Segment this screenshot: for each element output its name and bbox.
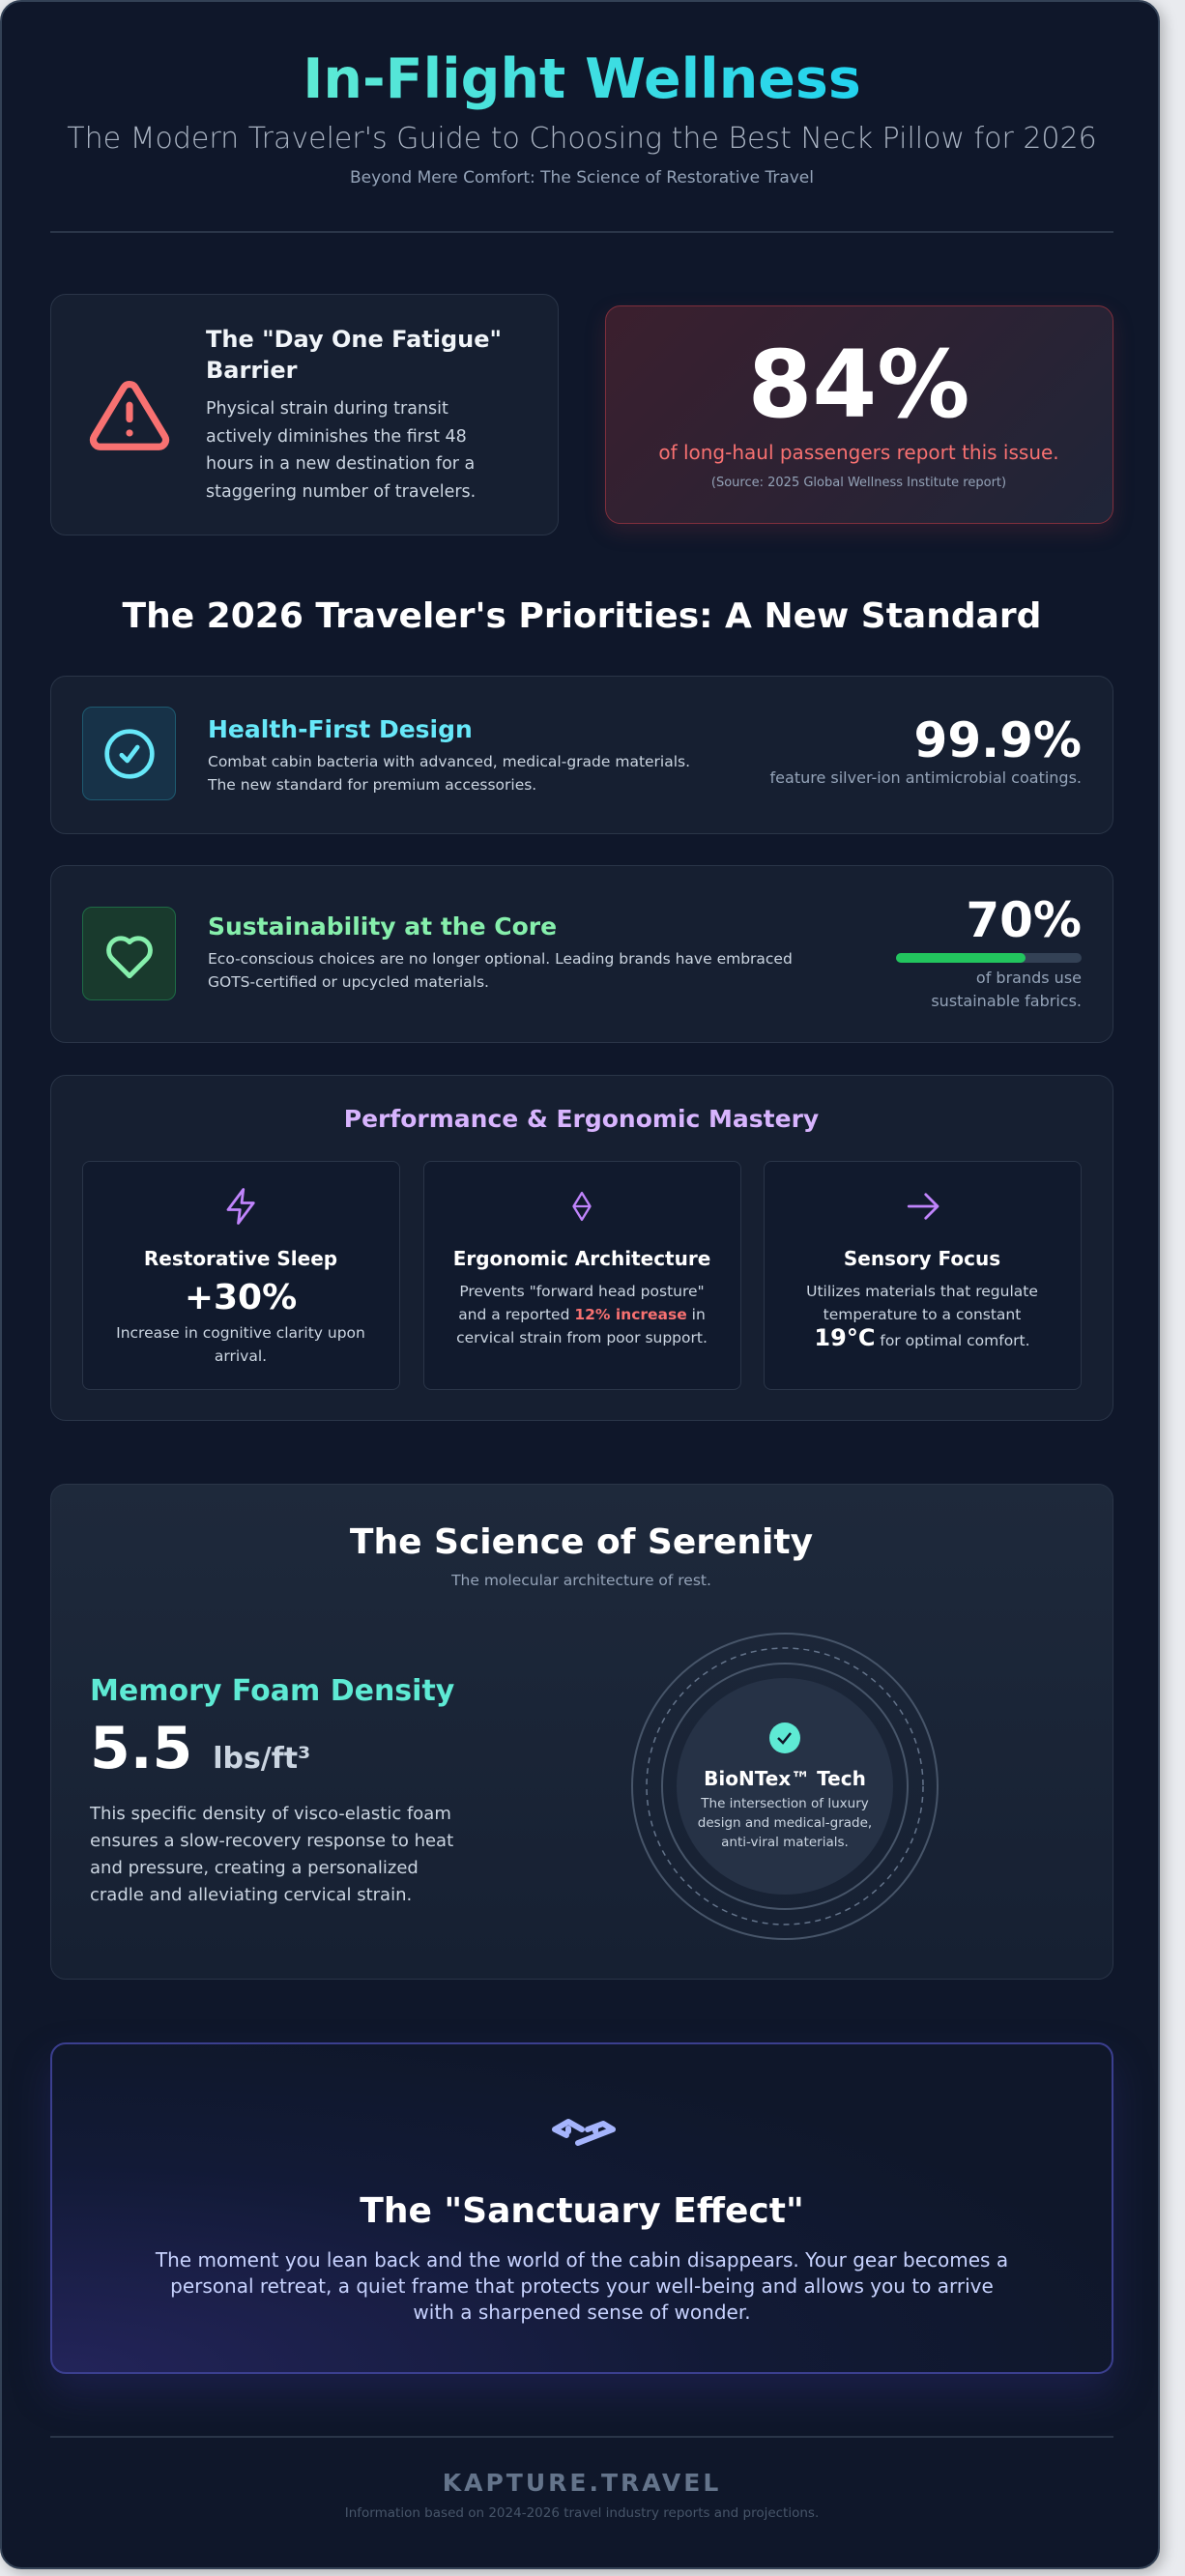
heading: Health-First Design <box>208 715 473 743</box>
icon: heart <box>82 907 176 1000</box>
panel: health-first <box>50 676 1113 834</box>
icon: warning <box>89 381 170 450</box>
card: restorative sleep: Restorative Sleep <box>144 1247 337 1270</box>
title: In-Flight Wellness <box>303 47 861 111</box>
stat with bar: sustainable fabrics. <box>931 992 1082 1010</box>
card: restorative sleep: Increase in cognitive clarity upon arrival. <box>116 1324 365 1365</box>
subtitle: The Modern Traveler's Guide to Choosing the Best Neck Pillow for 2026 <box>67 122 1097 156</box>
stat <box>769 712 1082 787</box>
card: ergonomic architecture: Ergonomic Architecture <box>453 1247 710 1270</box>
text: The moment you lean back and the world of the cabin disappears. Your gear becomes a personal retreat, a quiet frame that protects your well-being and allows you to arrive with a sharpened sense of wonder. <box>156 2248 1008 2324</box>
memory foam block: This specific density of visco-elastic foam ensures a slow-recovery response to heat and pressure, creating a personalized cradle and alleviating cervical strain. <box>90 1804 453 1905</box>
card: restorative sleep <box>82 1161 400 1390</box>
section heading: priorities: The 2026 Traveler's Priorities: A New Standard <box>123 596 1041 636</box>
heading: The "Sanctuary Effect" <box>360 2191 804 2231</box>
heading: Sustainability at the Core <box>208 912 557 941</box>
panel: day one fatigue <box>50 294 559 535</box>
icon: handshake <box>552 2119 616 2146</box>
card: sensory focus: Sensory Focus <box>844 1247 1000 1270</box>
subheading: The molecular architecture of rest. <box>451 1572 711 1589</box>
source: (Source: 2025 Global Wellness Institute report) <box>711 476 1006 490</box>
icon: bolt <box>226 1188 255 1225</box>
diagram: BioNTex circles <box>631 1633 939 1940</box>
text: Eco-conscious choices are no longer optional. Leading brands have embraced GOTS-certified or upcycled materials. <box>208 950 793 991</box>
caption: of long-haul passengers report this issue. <box>658 441 1059 464</box>
memory foam block: Memory Foam Density <box>90 1674 454 1708</box>
card: sensory focus: Utilizes materials that regulate temperature to a constant 19°C for optimal comfort. <box>806 1283 1038 1351</box>
footer note: Information based on 2024-2026 travel industry reports and projections. <box>345 2505 819 2521</box>
panel: sustainability <box>50 865 1113 1043</box>
panel: sanctuary effect <box>50 2042 1113 2374</box>
icon: check circle <box>82 707 176 800</box>
stat with bar: of brands use <box>976 969 1082 987</box>
diagram: BioNTex circles: BioNTex™ Tech <box>704 1767 866 1790</box>
text: Combat cabin bacteria with advanced, medical-grade materials. The new standard for premium accessories. <box>208 753 690 794</box>
icon: arrow <box>907 1193 939 1220</box>
stat with bar: 70% <box>966 892 1082 948</box>
card: sensory focus <box>764 1161 1082 1390</box>
panel: science of serenity <box>50 1484 1113 1980</box>
memory foam block: 5.5 lbs/ft³ <box>90 1715 310 1782</box>
stat: 99.9% <box>914 712 1082 768</box>
diagram: BioNTex circles: The intersection of luxury design and medical-grade, anti-viral materials. <box>698 1796 872 1850</box>
memory foam block <box>89 1674 454 1905</box>
stat with bar <box>896 892 1082 1010</box>
heading: Performance & Ergonomic Mastery <box>344 1105 819 1133</box>
icon: diamond <box>572 1191 592 1222</box>
panel: performance <box>50 1075 1113 1421</box>
stat: feature silver-ion antimicrobial coatings. <box>770 768 1082 787</box>
card: ergonomic architecture: Prevents "forward head posture" and a reported 12% increase in cervical strain from poor support. <box>456 1283 708 1346</box>
heading: The "Day One Fatigue" Barrier <box>206 326 502 384</box>
footer brand: KAPTURE.TRAVEL <box>443 2469 721 2497</box>
heading: The Science of Serenity <box>350 1522 813 1562</box>
big number: 84% <box>748 331 969 439</box>
card: ergonomic architecture <box>423 1161 741 1390</box>
panel: 84% stat <box>605 305 1113 524</box>
card: restorative sleep: +30% <box>185 1278 297 1317</box>
tagline: Beyond Mere Comfort: The Science of Restorative Travel <box>350 168 814 188</box>
text: Physical strain during transit actively diminishes the first 48 hours in a new destination for a staggering number of travelers. <box>206 399 476 501</box>
